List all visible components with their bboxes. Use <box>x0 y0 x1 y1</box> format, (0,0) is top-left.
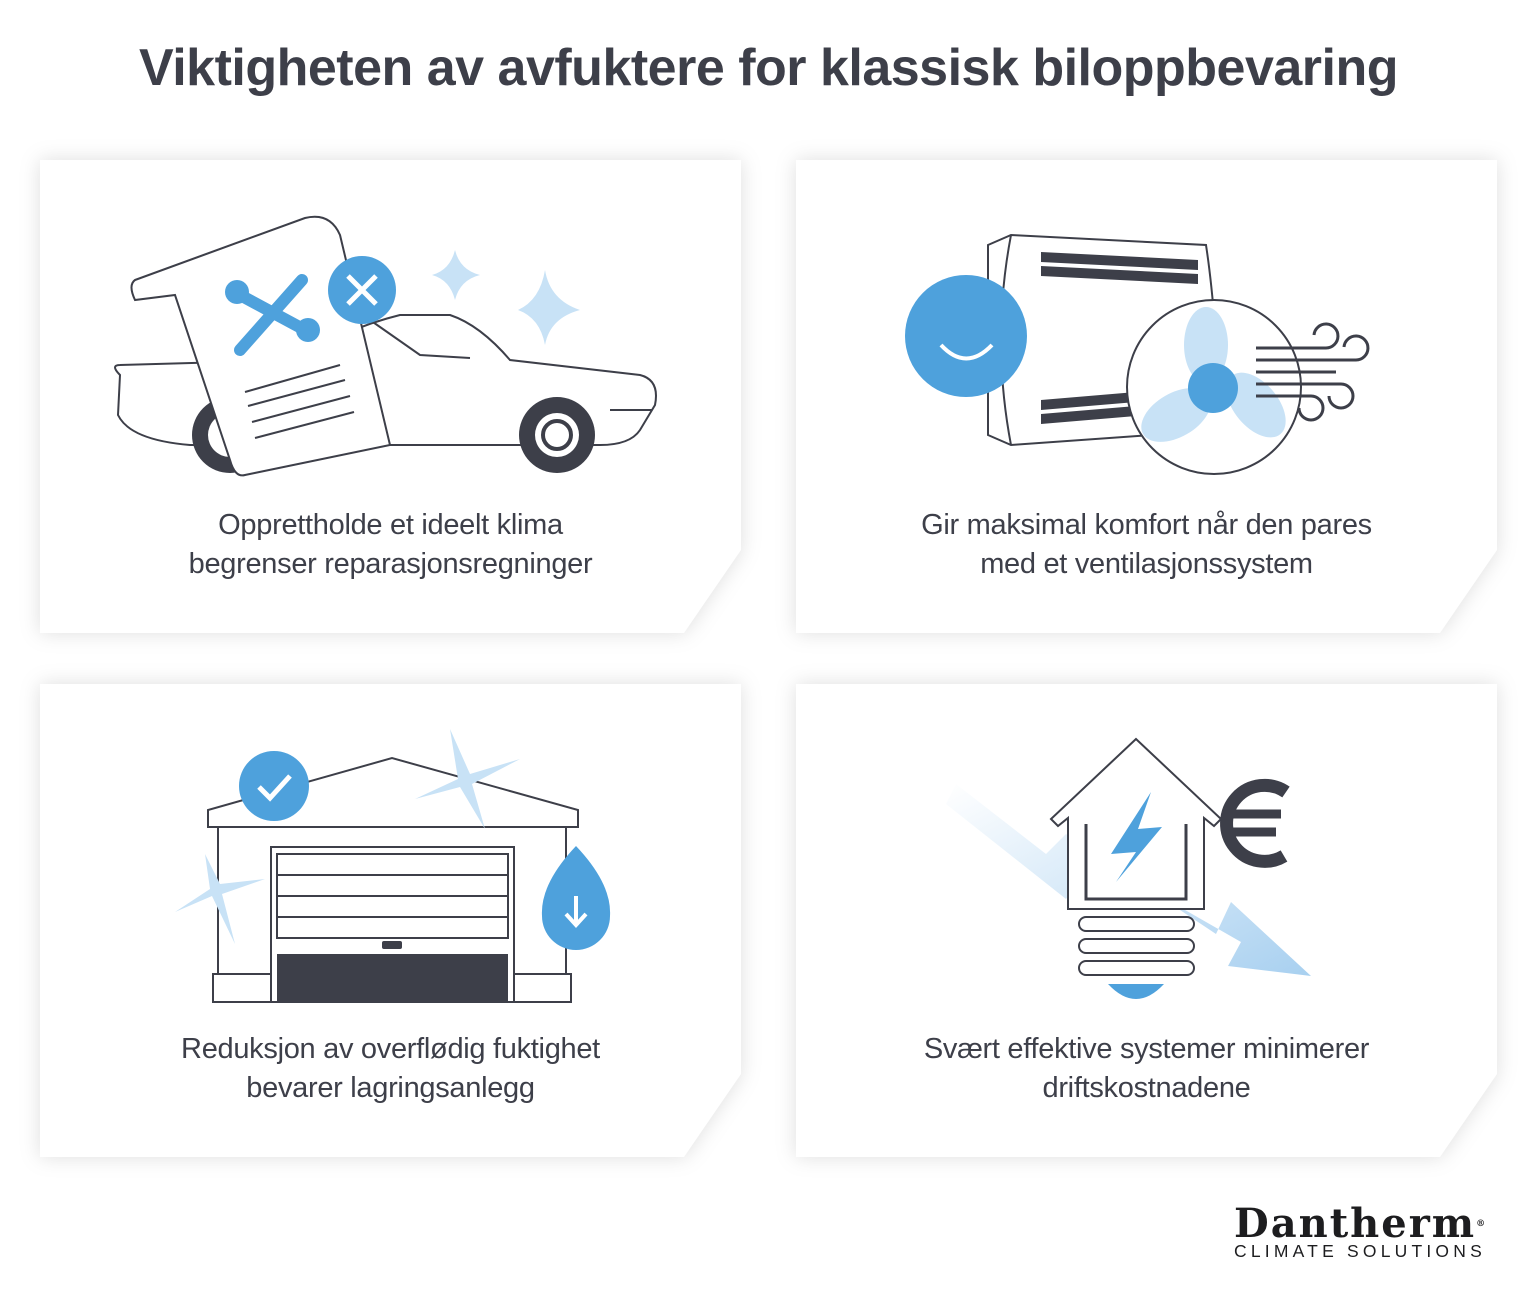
caption <box>183 1037 600 1103</box>
icon: dehumidifier with fan <box>905 234 1370 475</box>
caption: Opprettholde et ideelt klima <box>218 509 563 541</box>
caption: Gir maksimal komfort når den pares <box>921 509 1372 541</box>
title: Viktigheten av avfuktere for klassisk biloppbevaring <box>139 39 1398 97</box>
caption: med et ventilasjonssystem <box>980 548 1313 580</box>
panel: costs <box>790 678 1504 1164</box>
panel: humidity <box>34 678 748 1164</box>
icon: car with repair sheet <box>114 216 657 476</box>
caption: bevarer lagringsanlegg <box>246 1072 535 1104</box>
caption: driftskostnadene <box>1042 1072 1250 1104</box>
panel: comfort <box>790 154 1504 640</box>
icon: garage <box>176 730 610 1003</box>
logo: Dantherm® <box>1234 1200 1487 1247</box>
caption: Reduksjon av overflødig fuktighet <box>181 1033 600 1065</box>
caption: Svært effektive systemer minimerer <box>924 1033 1369 1065</box>
icon: light bulb house with falling arrow <box>958 738 1311 999</box>
caption: begrenser reparasjonsregninger <box>189 548 592 580</box>
caption <box>190 513 592 579</box>
logo: CLIMATE SOLUTIONS <box>1234 1241 1486 1261</box>
caption <box>922 510 1372 579</box>
caption <box>925 1037 1369 1098</box>
panel: repair bills <box>34 154 748 640</box>
